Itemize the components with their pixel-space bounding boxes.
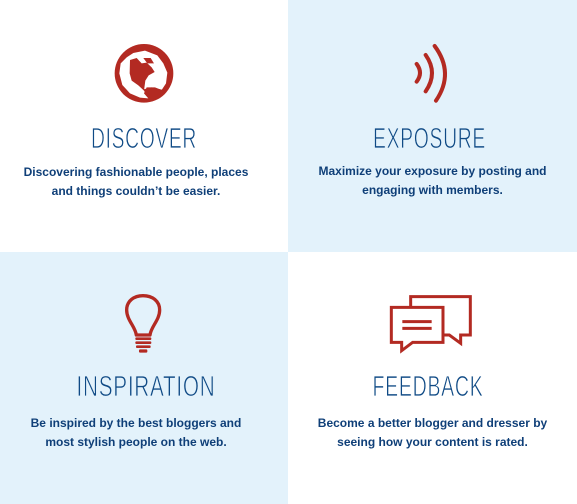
text: inspiration description	[31, 416, 241, 449]
text: discover description	[24, 165, 248, 198]
heading: discover: DISCOVER	[91, 123, 197, 155]
heading: inspiration: INSPIRATION	[76, 371, 216, 403]
text: exposure description: Maximize your exposure by posting and	[318, 164, 547, 178]
icon: globe	[114, 44, 174, 103]
icon: speech bubbles	[390, 295, 472, 354]
icon: light bulb	[125, 294, 162, 353]
panel: discover	[24, 44, 248, 198]
heading: exposure: EXPOSURE	[373, 123, 486, 155]
text: feedback description: Become a better blogger and dresser by	[318, 416, 547, 430]
text: discover description: Discovering fashionable people, places	[24, 165, 248, 179]
text: inspiration description: most stylish people on the web.	[45, 435, 227, 449]
text: exposure description: engaging with members.	[362, 183, 503, 197]
heading: feedback: FEEDBACK	[372, 371, 484, 403]
icon: signal arcs	[414, 44, 447, 103]
panel: exposure	[288, 0, 577, 252]
text: exposure description	[318, 164, 547, 197]
text: discover description: and things couldn’t be easier.	[52, 184, 220, 198]
text: feedback description	[318, 416, 548, 449]
panel: feedback	[318, 295, 548, 449]
panel: inspiration	[0, 252, 288, 504]
text: inspiration description: Be inspired by the best bloggers and	[31, 416, 241, 430]
text: feedback description: seeing how your content is rated.	[337, 435, 528, 449]
